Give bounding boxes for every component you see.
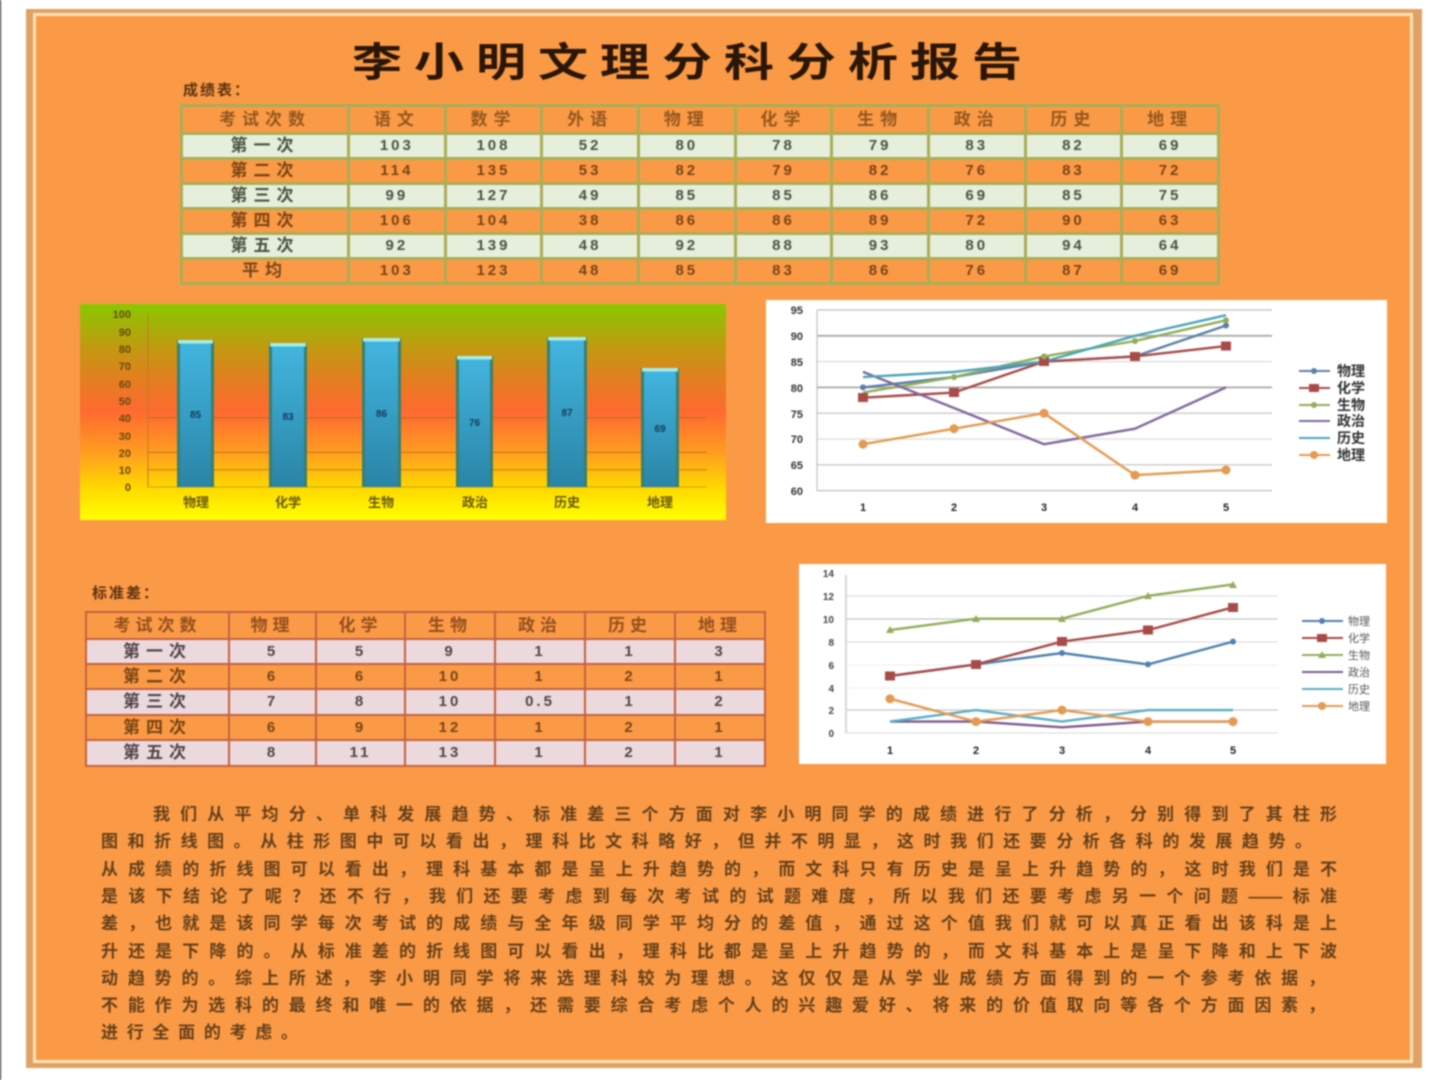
line chart: score trends: 75: [791, 409, 803, 421]
bar chart: average scores: 69: [654, 424, 666, 435]
chart legend: 化学: [1337, 380, 1365, 396]
bar chart: average scores: 20: [119, 448, 131, 460]
table: scores: 76: [965, 262, 988, 279]
title: 李小明文理分科分析报告: [352, 41, 1034, 85]
table: standard deviation: 1: [714, 718, 726, 736]
bar chart: average scores: 历史: [554, 495, 580, 510]
left page edge: [0, 0, 1, 1080]
table: standard deviation: 2: [624, 718, 636, 736]
line chart: standard deviation trends: 6: [828, 661, 834, 672]
table: scores: 第五次: [230, 236, 300, 255]
table: standard deviation: 5: [355, 642, 366, 660]
table: standard deviation: 5: [267, 642, 278, 660]
table: scores: 85: [675, 262, 698, 279]
table: standard deviation: 1: [624, 693, 636, 710]
table: scores: 79: [772, 162, 795, 179]
table: standard deviation: 第五次: [123, 743, 192, 762]
table: standard deviation: 9: [444, 642, 456, 660]
chart legend: 历史: [1337, 430, 1365, 446]
table: scores: 86: [772, 212, 795, 229]
bar chart: average scores: 86: [376, 409, 387, 420]
chart legend: 历史: [1348, 683, 1370, 696]
table: standard deviation: 化学: [338, 616, 382, 634]
chart legend: 物理: [1337, 363, 1365, 379]
table: standard deviation: 地理: [698, 616, 742, 634]
table: scores: 85: [772, 187, 795, 204]
table: standard deviation: 6: [267, 668, 278, 684]
table: scores: 数学: [470, 110, 516, 128]
table: standard deviation: 2: [714, 693, 726, 710]
table: scores: 78: [772, 137, 795, 154]
table: standard deviation: 历史: [608, 616, 652, 634]
table: standard deviation: 8: [267, 744, 278, 761]
table: scores: 53: [579, 162, 601, 179]
bar chart: average scores: 60: [119, 379, 131, 391]
line chart: score trends: 85: [791, 357, 803, 369]
table: scores: 考试次数: [219, 110, 311, 128]
table: standard deviation: 2: [624, 668, 636, 684]
table: standard deviation: 12: [439, 718, 461, 736]
bar chart: average scores: 生物: [368, 495, 394, 510]
table: standard deviation: 6: [267, 718, 278, 736]
table: scores: 69: [965, 187, 988, 204]
bar chart: average scores: 地理: [647, 495, 673, 510]
table: standard deviation: 考试次数: [114, 616, 202, 634]
chart legend: 地理: [1337, 447, 1365, 463]
table: scores: 103: [380, 262, 414, 279]
table: standard deviation: 2: [624, 744, 636, 761]
heading: score table: 成绩表：: [183, 82, 251, 99]
line chart: score trends: 60: [791, 486, 803, 498]
table: standard deviation: 13: [439, 744, 461, 761]
line chart: score trends: 65: [791, 460, 803, 472]
table: scores: 79: [869, 137, 891, 154]
table: scores: 127: [476, 187, 510, 204]
table: scores: 82: [1062, 137, 1085, 154]
table: scores: 外语: [567, 110, 613, 128]
analysis text block: 不能作为选科的最终和唯一的依据，还需要综合考虑个人的兴趣爱好、将来的价值取向等各个方面因素，: [101, 996, 1325, 1015]
table: scores: 第四次: [230, 211, 300, 230]
table: scores: 108: [476, 137, 510, 154]
table: standard deviation: 1: [534, 718, 546, 736]
table: standard deviation: 9: [355, 718, 366, 736]
heading: standard deviation: 标准差：: [92, 585, 160, 602]
line chart: standard deviation trends: 10: [823, 615, 834, 626]
line chart: score trends: 3: [1041, 502, 1047, 514]
table: standard deviation: 1: [534, 744, 546, 761]
bar chart: average scores: 物理: [183, 495, 209, 510]
bar chart: average scores: 87: [561, 408, 573, 419]
table: scores: 48: [579, 237, 601, 254]
line chart: standard deviation trends: 4: [828, 684, 834, 695]
table: scores: 93: [869, 237, 891, 254]
bar chart: average scores: 83: [282, 412, 294, 423]
chart legend: 物理: [1348, 614, 1370, 628]
line chart: score trends: 95: [791, 305, 803, 317]
table: scores: 106: [380, 212, 414, 229]
line chart: standard deviation trends: 2: [973, 745, 979, 757]
table: scores: 92: [675, 237, 698, 254]
table: scores: 语文: [374, 110, 420, 128]
table: scores: 135: [476, 162, 510, 179]
table: standard deviation: 8: [355, 693, 366, 710]
table: standard deviation: [84, 610, 766, 768]
analysis text block: 升还是下降的。从标准差的折线图可以看出，理科比都是呈上升趋势的，而文科基本上是呈下降和上下波: [101, 942, 1337, 961]
line chart: standard deviation trends: 3: [1059, 745, 1065, 757]
bar chart: average scores: [79, 303, 727, 521]
table: standard deviation: 第一次: [123, 642, 192, 660]
table: standard deviation: 第二次: [123, 666, 192, 686]
chart legend: [1302, 614, 1370, 713]
table: scores: 104: [476, 212, 510, 229]
table: scores: 63: [1159, 212, 1181, 229]
line chart: score trends: 2: [951, 502, 957, 514]
table: standard deviation: 生物: [428, 616, 472, 634]
bar chart: average scores: 30: [119, 431, 131, 443]
line chart: standard deviation trends: 0: [828, 729, 834, 740]
table: standard deviation: 11: [350, 744, 371, 761]
table: scores: 82: [675, 162, 698, 179]
table: scores: 86: [869, 187, 891, 204]
bar chart: average scores: 40: [119, 413, 131, 425]
table: standard deviation: 1: [534, 668, 546, 684]
table: scores: 地理: [1147, 110, 1193, 128]
table: standard deviation: 3: [714, 642, 726, 660]
table: scores: 94: [1062, 237, 1085, 254]
table: scores: 历史: [1050, 110, 1096, 128]
line chart: score trends: 5: [1223, 502, 1229, 514]
table: standard deviation: 10: [439, 668, 461, 684]
chart legend: 地理: [1348, 700, 1370, 713]
table: standard deviation: 1: [624, 642, 636, 660]
table: scores: 99: [385, 187, 408, 204]
table: scores: 政治: [954, 110, 1000, 128]
table: scores: 49: [579, 187, 601, 204]
bar chart: average scores: 80: [119, 344, 131, 356]
table: scores: 82: [869, 162, 891, 179]
analysis text block: 进行全面的考虑。: [101, 1023, 298, 1042]
table: scores: 化学: [760, 110, 806, 128]
analysis text block: 从成绩的折线图可以看出，理科基本都是呈上升趋势的，而文科只有历史是呈上升趋势的，这时我们是不: [101, 860, 1337, 879]
table: scores: 85: [675, 187, 698, 204]
bar chart: average scores: 90: [119, 327, 131, 339]
bar chart: average scores: 76: [469, 418, 480, 429]
table: scores: 第二次: [230, 161, 300, 180]
analysis text block: 我们从平均分、单科发展趋势、标准差三个方面对李小明同学的成绩进行了分析，分别得到了其柱形: [153, 805, 1337, 824]
line chart: standard deviation trends: 1: [887, 745, 893, 757]
line chart: standard deviation trends: 14: [823, 569, 834, 580]
line chart: standard deviation trends: [798, 563, 1387, 765]
chart legend: [1299, 363, 1365, 463]
table: scores: 89: [869, 212, 891, 229]
chart legend: 生物: [1337, 397, 1365, 413]
analysis text block: 差，也就是该同学每次考试的成绩与全年级同学平均分的差值，通过这个值我们就可以真正看出该科是上: [101, 914, 1337, 933]
bar chart: average scores: 10: [119, 465, 131, 477]
table: scores: 85: [1062, 187, 1085, 204]
table: scores: 86: [675, 212, 698, 229]
table: standard deviation: 物理: [250, 616, 294, 634]
table: standard deviation: 6: [355, 668, 366, 684]
table: standard deviation: 0.5: [525, 693, 555, 710]
table: standard deviation: 1: [714, 668, 726, 684]
table: scores: 平均: [242, 261, 288, 280]
table: scores: 75: [1159, 187, 1181, 204]
chart legend: 政治: [1337, 413, 1365, 429]
line chart: score trends: 1: [860, 502, 866, 514]
table: scores: 生物: [857, 110, 903, 128]
table: standard deviation: 10: [439, 693, 461, 710]
table: scores: 52: [579, 137, 601, 154]
table: scores: 80: [965, 237, 988, 254]
analysis text block: [100, 804, 1338, 1042]
bar chart: average scores: 政治: [462, 495, 488, 510]
table: scores: 69: [1159, 137, 1181, 154]
table: standard deviation: 第四次: [123, 718, 192, 736]
table: scores: 139: [476, 237, 510, 254]
line chart: score trends: 70: [791, 434, 803, 446]
table: scores: 114: [380, 162, 413, 179]
bar chart: average scores: 70: [119, 361, 131, 373]
analysis text block: 是该下结论了呢？还不行，我们还要考虑到每次考试的试题难度，所以我们还要考虑另一个问题——标准: [101, 887, 1337, 906]
chart legend: 政治: [1348, 665, 1370, 679]
table: scores: 86: [869, 262, 891, 279]
table: scores: 64: [1159, 237, 1181, 254]
table: scores: 90: [1062, 212, 1085, 229]
table: scores: [179, 103, 1221, 286]
table: scores: 80: [675, 137, 698, 154]
table: standard deviation: 1: [534, 642, 546, 660]
table: scores: 83: [772, 262, 795, 279]
table: scores: 123: [476, 262, 510, 279]
table: scores: 72: [1159, 162, 1181, 179]
line chart: standard deviation trends: 2: [828, 706, 834, 717]
bar chart: average scores: 50: [119, 396, 131, 408]
line chart: score trends: 4: [1132, 502, 1139, 514]
table: standard deviation: 1: [714, 744, 726, 761]
table: standard deviation: 第三次: [123, 692, 192, 711]
table: scores: 第一次: [230, 136, 300, 155]
line chart: standard deviation trends: 12: [823, 592, 834, 603]
table: scores: 83: [965, 137, 988, 154]
chart legend: 化学: [1348, 631, 1370, 645]
analysis text block: 动趋势的。综上所述，李小明同学将来选理科较为理想。这仅仅是从学业成绩方面得到的一个参考依据，: [101, 969, 1325, 988]
line chart: standard deviation trends: 5: [1230, 745, 1236, 757]
table: scores: 103: [380, 137, 414, 154]
table: scores: 第三次: [230, 186, 300, 205]
table: scores: 72: [965, 212, 988, 229]
line chart: score trends: 80: [791, 383, 803, 395]
table: scores: 87: [1062, 262, 1085, 279]
bar chart: average scores: 化学: [275, 495, 301, 510]
bar chart: average scores: 85: [190, 410, 201, 421]
table: standard deviation: 政治: [518, 616, 562, 634]
analysis text block: 图和折线图。从柱形图中可以看出，理科比文科略好，但并不明显，这时我们还要分析各科的发展趋势。: [101, 832, 1312, 851]
table: scores: 83: [1062, 162, 1085, 179]
table: scores: 物理: [664, 110, 710, 128]
table: scores: 48: [579, 262, 601, 279]
table: scores: 69: [1159, 262, 1181, 279]
line chart: standard deviation trends: 4: [1145, 745, 1152, 757]
line chart: score trends: 90: [791, 331, 803, 343]
line chart: score trends: [765, 299, 1388, 524]
table: scores: 92: [385, 237, 408, 254]
line chart: standard deviation trends: 8: [828, 638, 834, 649]
table: scores: 38: [579, 212, 601, 229]
table: scores: 88: [772, 237, 795, 254]
bar chart: average scores: 0: [125, 482, 131, 494]
table: standard deviation: 7: [267, 693, 278, 710]
bar chart: average scores: 100: [113, 309, 131, 321]
chart legend: 生物: [1348, 648, 1370, 662]
table: scores: 76: [965, 162, 988, 179]
